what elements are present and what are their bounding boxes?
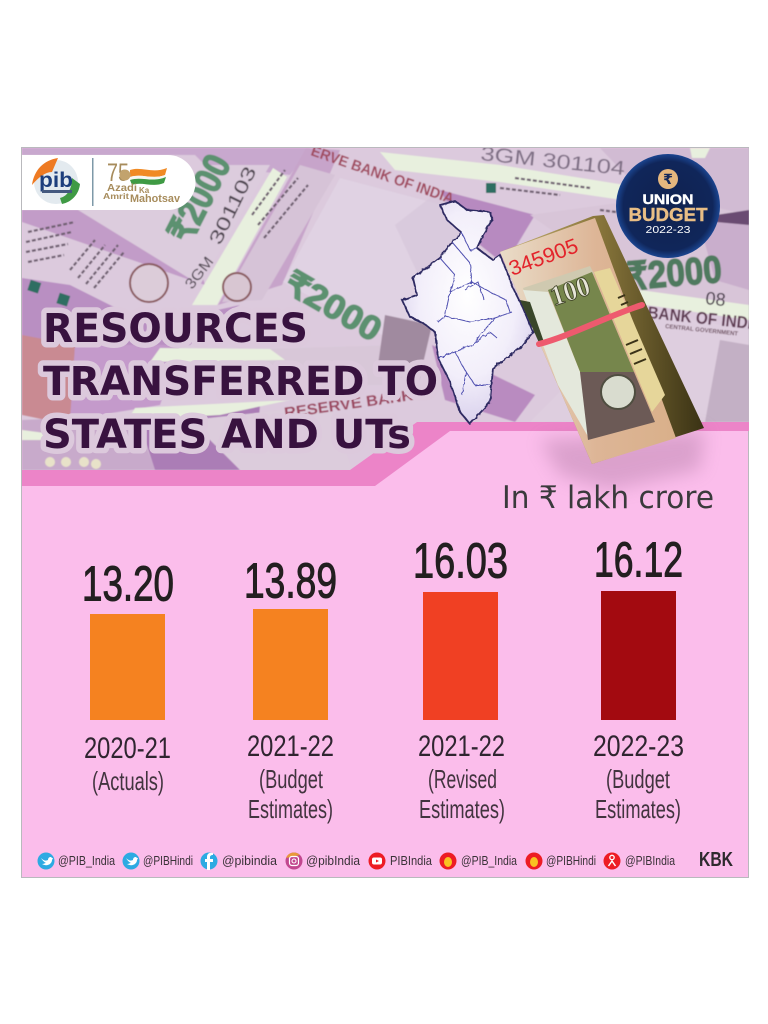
column: 2020-21 actuals	[82, 558, 174, 796]
social media footer: @PIBHindi	[546, 854, 596, 868]
red rubber band	[539, 305, 642, 344]
banknote printed text: 301103	[206, 163, 261, 248]
bar chart	[82, 534, 684, 824]
badge: Union Budget 2022-23: UNION	[642, 191, 694, 207]
top lilac strip	[22, 148, 310, 175]
lower left banknote	[22, 415, 155, 470]
column: 2021-22 revised estimates: 16.03	[413, 534, 508, 588]
title: TRANSFERRED TO	[43, 359, 438, 405]
banknote printed text: 3GM 301104	[479, 143, 626, 180]
column: 2020-21 actuals: 13.20	[82, 558, 174, 612]
unit label: In ₹ lakh crore	[502, 480, 714, 516]
banknote printed text: CENTRAL GOVERNMENT	[665, 324, 739, 338]
note bottom dark panel	[580, 372, 655, 440]
column: 2021-22 budget estimates: Estimates)	[248, 794, 333, 824]
social media footer: @pibIndia	[306, 854, 360, 868]
title: RESOURCES	[43, 306, 308, 352]
serial number: 345905	[506, 234, 581, 281]
icon: Azadi Ka Amrit Mahotsav logo: Ka	[139, 186, 150, 195]
ornament band of note	[523, 266, 594, 298]
column: 2022-23 budget estimates	[593, 534, 684, 824]
column: 2022-23 budget estimates: 16.12	[594, 534, 683, 588]
banknote printed text: 08	[705, 288, 727, 310]
title	[43, 306, 438, 458]
darker pink header band	[22, 422, 749, 486]
badge: Union Budget 2022-23: 2022-23	[646, 224, 691, 236]
column: 2021-22 revised estimates	[413, 534, 508, 824]
column: 2021-22 budget estimates: (Budget	[259, 764, 324, 794]
large central note border	[218, 148, 340, 305]
icon: Azadi Ka Amrit Mahotsav logo	[103, 159, 181, 205]
icon: koo	[526, 852, 542, 870]
icon: sharechat	[604, 852, 620, 870]
social media footer: @PIBHindi	[143, 854, 193, 868]
icon: PIB logo: pib	[39, 169, 73, 192]
column: 2022-23 budget estimates: 2022-23	[593, 730, 684, 763]
green security marks	[27, 183, 496, 307]
icon: Azadi Ka Amrit Mahotsav logo: Amrit	[103, 191, 129, 201]
icon: twitter	[38, 852, 54, 870]
banknote roll shadow	[540, 430, 705, 490]
icon: youtube	[368, 852, 386, 870]
column: 2022-23 budget estimates: Estimates)	[595, 794, 681, 824]
logo panel: PIB and Azadi Ka Amrit Mahotsav	[22, 155, 196, 210]
column: 2020-21 actuals: (Actuals)	[92, 766, 164, 796]
social media footer	[38, 852, 675, 870]
icon: instagram	[286, 852, 302, 870]
banknote printed text: ERVE BANK OF INDIA	[309, 143, 456, 208]
state borders	[438, 233, 512, 395]
column: 2021-22 revised estimates: (Revised	[428, 764, 497, 794]
icon: koo	[440, 852, 456, 870]
column: 2020-21 actuals: 2020-21	[84, 732, 171, 765]
banknote printed text: ₹2000	[278, 264, 388, 349]
banknote printed text: BANK OF INDI	[647, 303, 753, 333]
banknote printed text	[161, 143, 753, 422]
icon: PIB logo	[32, 158, 80, 204]
column: 2021-22 budget estimates: 13.89	[244, 554, 337, 608]
note value 100: 100	[547, 271, 594, 313]
column: 2021-22 revised estimates: Estimates)	[419, 794, 505, 824]
right note	[530, 214, 535, 218]
KBK credit: KBK	[699, 849, 733, 871]
title: STATES AND UTs	[43, 412, 411, 458]
icon: Azadi Ka Amrit Mahotsav logo: 75	[107, 159, 129, 187]
RBI seal	[601, 375, 635, 409]
left note band	[22, 210, 205, 285]
pale green paper strips	[22, 148, 749, 440]
banknote printed text: ₹2000	[161, 148, 240, 249]
banknote printed text: RESERVE BANK	[283, 387, 414, 422]
social media footer: PIBIndia	[390, 854, 432, 868]
icon: Azadi Ka Amrit Mahotsav logo: Azadi	[107, 182, 137, 194]
cream stripe on note	[594, 268, 665, 412]
banknote printed text: ₹2000	[625, 249, 723, 299]
icon: Azadi Ka Amrit Mahotsav logo: Mahotsav	[130, 193, 181, 205]
badge: Union Budget 2022-23: ₹	[663, 172, 673, 188]
column: 2021-22 budget estimates	[244, 554, 337, 824]
infographic card background	[22, 148, 748, 878]
social media footer: @PIB_India	[461, 854, 517, 868]
column: 2022-23 budget estimates: (Budget	[606, 764, 671, 794]
map of India	[402, 201, 533, 424]
green panel of note	[548, 272, 634, 372]
column: 2021-22 revised estimates: 2021-22	[418, 730, 505, 763]
social media footer: @pibindia	[222, 854, 277, 868]
seal on banknote	[130, 264, 168, 302]
red seal area	[22, 334, 76, 420]
banknote photo background	[22, 143, 753, 472]
column: 2021-22 budget estimates: 2021-22	[247, 730, 334, 763]
icon: facebook	[200, 852, 218, 870]
badge: Union Budget 2022-23	[616, 154, 720, 258]
badge: Union Budget 2022-23: BUDGET	[628, 205, 708, 225]
banknote printed text: 3GM	[182, 254, 217, 292]
rolled 100 rupee note	[500, 215, 704, 464]
white portrait area	[523, 290, 590, 440]
banknote fine print	[26, 170, 640, 288]
social media footer: @PIBIndia	[625, 854, 675, 868]
left note lower purple	[22, 278, 240, 345]
coin dots	[45, 457, 101, 469]
social media footer: @PIB_India	[58, 854, 115, 868]
edge stripes	[618, 295, 646, 364]
icon: twitter	[122, 852, 140, 870]
